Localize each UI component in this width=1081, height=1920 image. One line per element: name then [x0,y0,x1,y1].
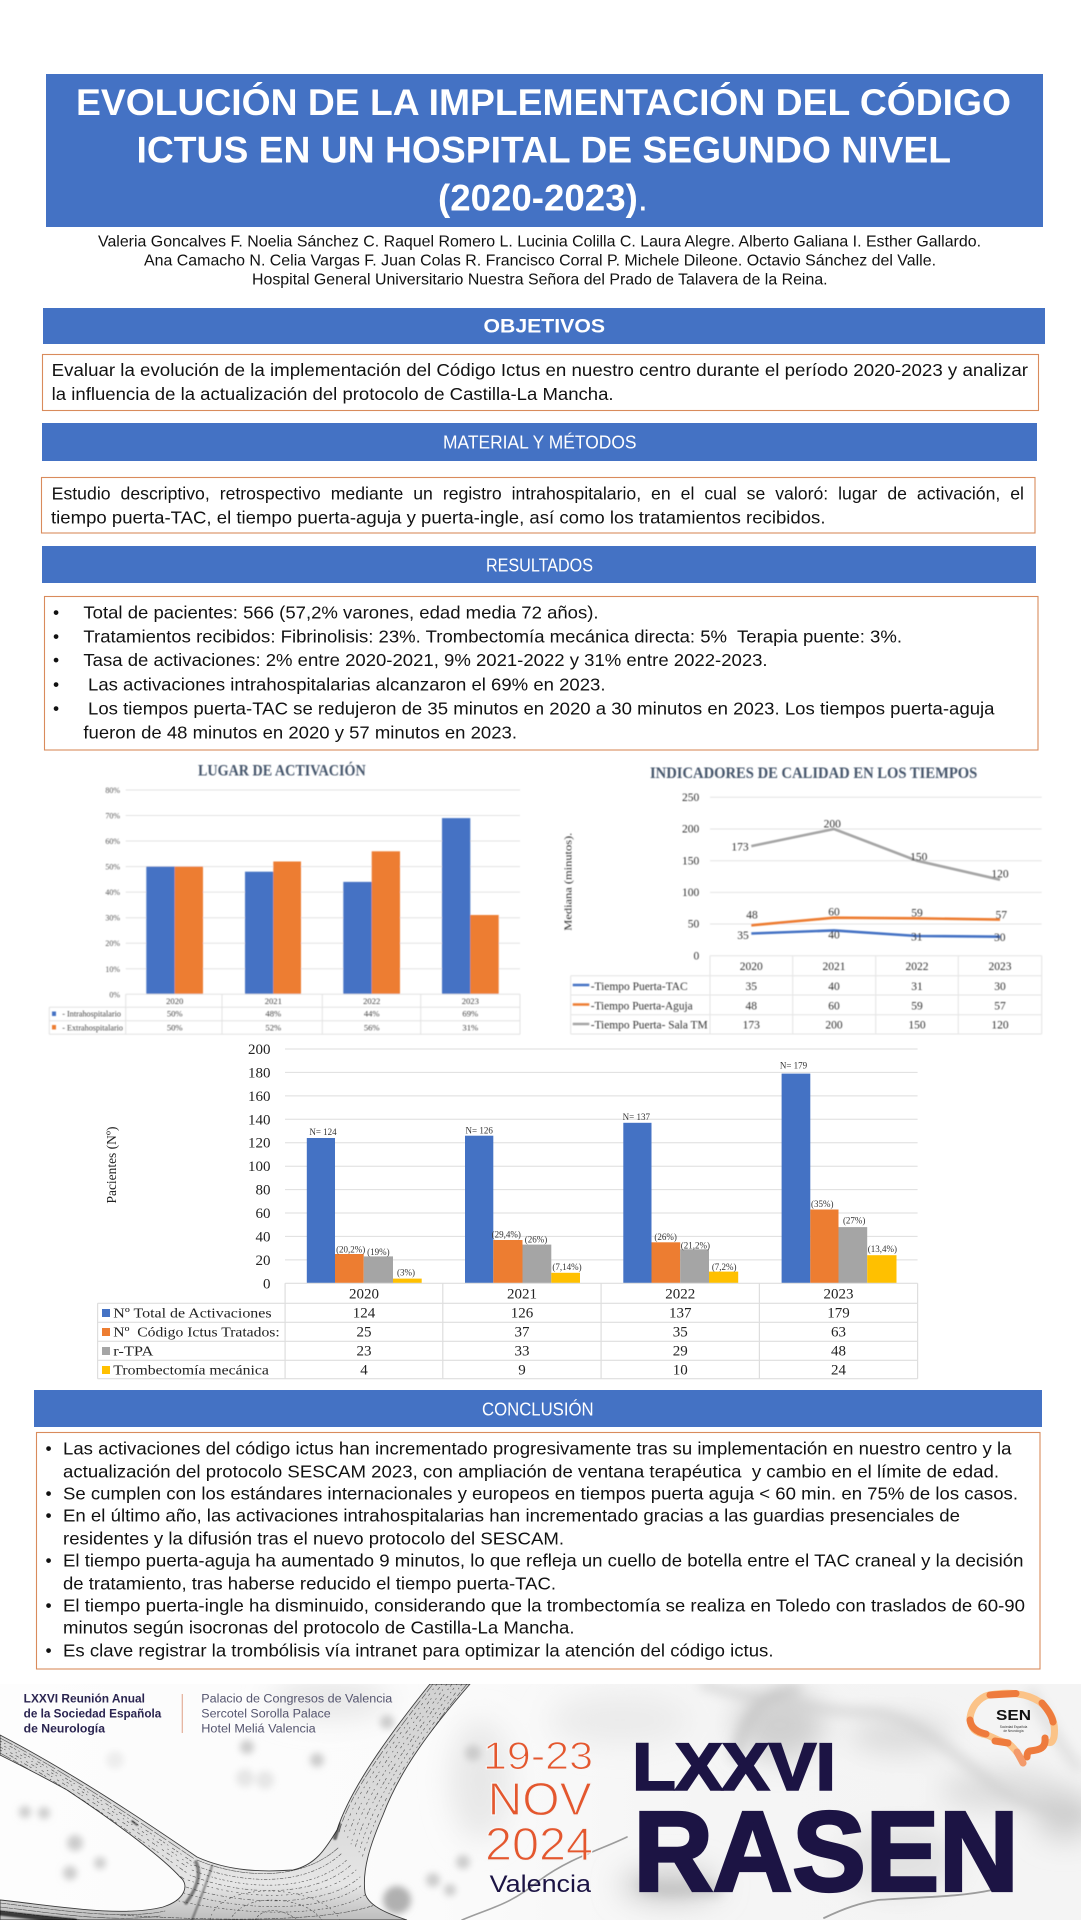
bar data labels: (21,2%) [681,1240,710,1250]
heading: conclusión [34,1390,1042,1427]
data table: tiempos: 2020 [740,961,763,973]
line: tiempo puerta-sala TM [751,829,1000,880]
title: ICTUS EN UN HOSPITAL DE SEGUNDO NIVEL [136,130,951,171]
y axis labels: percent: 30% [105,914,120,923]
y axis labels: minutes: 100 [682,887,700,899]
panel: conclusión text: • [46,1483,52,1503]
y axis labels: percent: 60% [105,837,120,846]
panel: conclusión text: Las activaciones del código ictus han incrementado progresivamente tras su implementación en nuestro centro y la [63,1439,1012,1459]
panel: métodos text: tiempo puerta-TAC, el tiempo puerta-aguja y puerta-ingle, así como los tratamientos recibidos. [51,507,825,527]
line data labels: 120 [991,868,1009,880]
data table: lugar de activación: 2023 [462,996,479,1006]
line data labels: 59 [911,908,923,920]
y axis labels: minutes: 200 [682,824,700,836]
data table: lugar de activación: - Extrahospitalario [62,1023,123,1033]
panel: métodos text: Estudio descriptivo, retrospectivo mediante un registro intrahospitalario, en el cual se valoró: lugar de activación, el [52,483,1024,503]
logo: SEN brain [970,1693,1054,1763]
data table: activaciones: 48 [831,1343,846,1359]
data table: activaciones: 33 [514,1343,530,1359]
line data labels: 60 [828,906,840,918]
data table: tiempos: 30 [994,981,1006,993]
line data labels: 57 [996,909,1007,921]
data table: activaciones: Nº Total de Activaciones [113,1306,272,1321]
y axis labels: minutes: 0 [694,950,700,962]
data table: lugar de activación: 50% [167,1023,183,1033]
data table: activaciones: 124 [353,1305,376,1321]
chart title: lugar de activación: LUGAR DE ACTIVACIÓN [198,762,366,779]
panel: conclusión text: • [46,1596,52,1616]
y axis labels: patients: 60 [256,1206,270,1222]
data table: activaciones: 24 [831,1362,846,1378]
data table: lugar de activación: 2022 [363,996,380,1006]
data table: activaciones: 25 [356,1324,372,1340]
data table: tiempos: 2021 [822,961,846,973]
panel: conclusión text [36,1432,1040,1669]
y axis labels: patients: 0 [263,1276,270,1292]
bar data labels: (26%) [525,1235,547,1245]
panel: conclusión text: • [46,1641,52,1661]
panel: resultados text [44,596,1038,750]
y axis labels: percent: 0% [109,990,120,999]
y axis labels: percent: 40% [105,888,120,897]
banner text: dates and city: 2024 [485,1818,593,1870]
bar data labels: N= 126 [466,1126,493,1136]
data table: tiempos: -Tiempo Puerta-TAC [591,981,688,993]
line data labels: 150 [910,852,928,864]
banner text: dates and city: 19-23 [483,1735,593,1778]
line data labels: 35 [737,930,749,942]
bar data labels: N= 124 [309,1127,337,1137]
panel: conclusión text: Se cumplen con los estándares internacionales y europeos en tiempos puerta aguja < 60 min. en 75% de los casos. [63,1483,1018,1503]
bar data labels: (19%) [367,1247,390,1257]
title [46,74,1043,227]
y axis labels: patients: 20 [256,1253,270,1269]
panel: resultados text: • [53,650,59,670]
panel: conclusión text: • [46,1439,52,1459]
panel: resultados text: fueron de 48 minutos en 2020 y 57 minutos en 2023. [83,722,517,742]
data table: lugar de activación: - Intrahospitalario [62,1009,121,1019]
bar data labels: N= 179 [780,1060,808,1070]
data table: lugar de activación: 56% [364,1023,380,1033]
banner text: dates and city: Valencia [490,1871,592,1898]
data table: tiempos: -Tiempo Puerta- Sala TM [591,1020,708,1032]
neuron illustration [0,1684,470,1920]
data table: tiempos: 200 [825,1020,843,1032]
bar data labels: (29,4%) [492,1229,521,1239]
heading: material y métodos: MATERIAL Y MÉTODOS [443,432,636,452]
panel: objetivos text: la influencia de la actualización del protocolo de Castilla-La Mancha. [52,384,614,404]
panel: objetivos text [42,354,1038,410]
axis title: pacientes: Pacientes (Nº) [105,1126,120,1204]
banner text: venues [201,1694,393,1735]
y axis labels: patients: 100 [248,1159,270,1175]
banner text: LXXVI RASEN: RASEN [634,1788,1018,1914]
line data labels: 30 [994,932,1006,944]
data table: activaciones: 63 [831,1324,846,1340]
line data labels: 31 [911,932,923,944]
chart: indicadores de calidad en los tiempos [564,765,1042,1034]
data table: activaciones: 4 [360,1362,368,1378]
data table: lugar de activación: 50% [167,1009,183,1019]
line: tiempo puerta-TAC [751,930,1000,937]
bar data labels: (20,2%) [336,1245,365,1255]
data table: activaciones: 2022 [665,1286,695,1302]
heading: conclusión: CONCLUSIÓN [482,1399,594,1420]
panel: conclusión text: • [46,1506,52,1526]
data table: lugar de activación [49,994,520,1034]
data table: activaciones: 2021 [507,1286,537,1302]
panel: resultados text: Los tiempos puerta-TAC se redujeron de 35 minutos en 2020 a 30 minutos en 2023. Los tiempos puerta-aguja [88,698,995,718]
logo: SEN brain: de Neurología [1003,1729,1024,1733]
line data labels: 173 [731,842,749,854]
data table: lugar de activación: 2020 [166,996,183,1006]
panel: resultados text: • [53,602,59,622]
data table: lugar de activación: 52% [265,1023,281,1033]
chart: activaciones y tratamientos por año [98,1042,918,1379]
bars: intrahospitalario [146,818,470,994]
y axis labels: patients: 200 [248,1042,270,1058]
banner text: venues: Palacio de Congresos de Valencia [201,1694,393,1706]
y axis labels: percent: 70% [105,812,120,820]
data table: tiempos: 59 [911,1000,923,1012]
y axis labels: patients: 160 [248,1089,270,1105]
bar data labels: (13,4%) [868,1244,897,1254]
authors and affiliation: Hospital General Universitario Nuestra Señora del Prado de Talavera de la Reina. [252,272,828,289]
bars: total de activaciones [307,1074,810,1283]
banner text: dates and city: NOV [488,1773,592,1825]
y axis labels: percent: 80% [105,786,120,795]
line data labels: 48 [746,910,758,922]
y axis labels: minutes: 50 [688,919,700,931]
line data labels: 40 [828,929,840,941]
line: tiempo puerta-aguja [751,918,1000,925]
data table: tiempos: 2022 [906,961,929,973]
y axis labels: patients: 140 [248,1112,270,1128]
data table: tiempos: 57 [994,1000,1006,1012]
banner text: LXXVI RASEN: LXXVI [632,1730,836,1804]
data table: activaciones: 37 [514,1324,530,1340]
data table: activaciones: 10 [673,1362,688,1378]
data table: activaciones [98,1283,918,1379]
data table: tiempos: 60 [828,1000,840,1012]
bars: extrahospitalario [175,851,499,994]
y axis labels: percent: 10% [105,965,120,974]
panel: conclusión text: El tiempo puerta-aguja ha aumentado 9 minutos, lo que refleja un cuello de botella entre el TAC craneal y la decisión [63,1551,1024,1571]
panel: conclusión text: residentes y la difusión tras el nuevo protocolo del SESCAM. [63,1528,564,1548]
data table: lugar de activación: 31% [462,1023,478,1033]
data table: tiempos: 173 [743,1020,760,1032]
data table: lugar de activación: 44% [364,1009,380,1019]
panel: resultados text: • [53,626,59,646]
bar data labels: (3%) [397,1268,415,1278]
authors and affiliation [98,234,981,289]
heading: resultados: RESULTADOS [486,556,593,576]
heading: material y métodos [42,423,1037,461]
logo: SEN brain: SEN [996,1707,1031,1724]
bars: r-TPA [364,1227,867,1283]
panel: conclusión text: • [46,1551,52,1571]
line data labels: 200 [824,818,841,830]
data table: tiempos: 150 [908,1020,926,1032]
y axis labels: percent: 20% [105,939,120,948]
authors and affiliation: Valeria Goncalves F. Noelia Sánchez C. Raquel Romero L. Lucinia Colilla C. Laura Alegre. Alberto Galiana I. Esther Gallardo. [98,234,981,251]
bar data labels: (35%) [811,1199,834,1209]
bar data labels: (7,14%) [552,1262,582,1272]
title: (2020-2023). [438,178,648,219]
authors and affiliation: Ana Camacho N. Celia Vargas F. Juan Colas R. Francisco Corral P. Michele Dileone. Octavio Sánchez del Valle. [144,253,936,270]
panel: conclusión text: En el último año, las activaciones intrahospitalarias han incrementado gracias a las guardias presenciales de [63,1506,960,1526]
data table: activaciones: 35 [673,1324,688,1340]
data table: activaciones: Trombectomía mecánica [113,1363,270,1378]
data table: lugar de activación: 69% [462,1009,478,1019]
data table: tiempos: 48 [746,1000,757,1012]
bar data labels: (7,2%) [712,1262,737,1272]
bar data labels: (27%) [843,1216,865,1226]
data table: lugar de activación: 48% [265,1009,281,1019]
panel: métodos text [42,478,1035,533]
data table: tiempos: -Tiempo Puerta-Aguja [591,1000,693,1012]
panel: resultados text: Las activaciones intrahospitalarias alcanzaron el 69% en 2023. [88,675,606,695]
bar data labels [309,1060,897,1278]
data table: lugar de activación: 2021 [265,996,282,1006]
y axis labels: patients: 40 [256,1229,270,1245]
line data labels [731,818,1009,944]
panel: conclusión text: El tiempo puerta-ingle ha disminuido, considerando que la trombectomía se realiza en Toledo con traslados de 60-90 [63,1596,1025,1616]
y axis labels: patients [248,1042,270,1292]
footer banner: LXXVI RASEN [0,1682,1081,1920]
bar data labels: (26%) [654,1232,677,1242]
heading: objetivos [43,308,1045,344]
panel: conclusión text: Es clave registrar la trombólisis vía intranet para optimizar la atención del código ictus. [63,1641,773,1661]
data table: tiempos [571,956,1042,1034]
data table: tiempos: 31 [911,981,923,993]
panel: conclusión text: de tratamiento, tras haberse reducido el tiempo puerta-TAC. [63,1573,556,1593]
y axis labels: patients: 180 [248,1065,270,1081]
data table: activaciones: 9 [518,1362,526,1378]
y axis labels: percent [105,786,120,999]
title: EVOLUCIÓN DE LA IMPLEMENTACIÓN DEL CÓDIGO [76,81,1011,123]
y axis labels: minutes [682,792,700,962]
banner text: congress name: de la Sociedad Española [24,1708,162,1720]
banner text: congress name: LXXVI Reunión Anual [24,1694,145,1706]
y axis labels: percent: 50% [105,863,120,872]
data table: activaciones: 126 [511,1305,534,1321]
panel: resultados text: Tasa de activaciones: 2% entre 2020-2021, 9% 2021-2022 y 31% entre 2022-2023. [83,650,768,670]
data table: activaciones: 137 [669,1305,692,1321]
data table: tiempos: 35 [746,981,757,993]
data table: activaciones: 2020 [349,1286,379,1302]
banner text: congress name [24,1694,162,1735]
banner text: venues: Hotel Meliá Valencia [201,1723,316,1735]
thin nerve fibres [462,1837,992,1920]
panel: resultados text: • [53,675,59,695]
data table: tiempos: 2023 [988,961,1012,973]
chart title: indicadores: INDICADORES DE CALIDAD EN LOS TIEMPOS [650,765,977,782]
data table: activaciones: 179 [827,1305,850,1321]
bars: trombectomía mecánica [393,1255,896,1283]
y axis labels: patients: 120 [248,1136,270,1152]
data table: activaciones: r-TPA [113,1344,154,1359]
bars: código ictus tratados [335,1210,838,1283]
heading: resultados [42,546,1036,583]
data table: activaciones: 23 [356,1343,372,1359]
heading: objetivos: OBJETIVOS [484,316,605,337]
y axis labels: minutes: 250 [682,792,700,804]
panel: resultados text: Tratamientos recibidos: Fibrinolisis: 23%. Trombectomía mecánica directa: 5% Terapia puente: 3%. [83,626,902,646]
panel: resultados text: Total de pacientes: 566 (57,2% varones, edad media 72 años). [83,602,599,622]
banner text: LXXVI RASEN [632,1730,1018,1914]
banner text: congress name: de Neurología [24,1723,106,1735]
axis title: mediana: Mediana (minutos). [564,833,574,931]
banner text: dates and city [483,1735,593,1898]
y axis labels: minutes: 150 [682,855,700,867]
panel: conclusión text: minutos según isocronas del protocolo de Castilla-La Mancha. [63,1617,574,1637]
chart: lugar de activación [49,762,520,1034]
y axis labels: patients: 80 [256,1183,270,1199]
data table: tiempos: 40 [828,981,840,993]
banner text: venues: Sercotel Sorolla Palace [201,1708,331,1720]
data table: activaciones: 29 [673,1343,688,1359]
panel: objetivos text: Evaluar la evolución de la implementación del Código Ictus en nuestro centro durante el período 2020-2023 y analizar [52,360,1028,380]
logo: SEN brain: Sociedad Española [1000,1725,1027,1729]
data table: tiempos: 120 [991,1020,1009,1032]
data table: activaciones: Nº Código Ictus Tratados: [113,1325,280,1340]
panel: conclusión text: actualización del protocolo SESCAM 2023, con ampliación de ventana terapéutica y cambio en el límite de edad. [63,1462,999,1482]
panel: resultados text: • [53,698,59,718]
bar data labels: N= 137 [623,1112,650,1122]
data table: activaciones: 2023 [824,1286,854,1302]
